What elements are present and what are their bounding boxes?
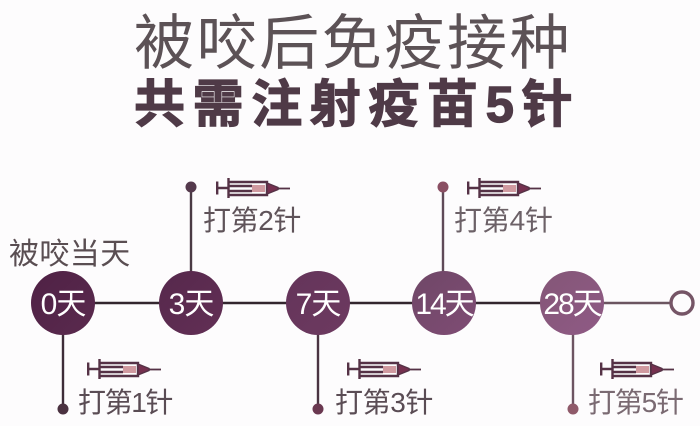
branch: dose 4 stem (438, 182, 448, 275)
branch: dose 3 stem (312, 330, 324, 414)
end ring (671, 292, 693, 314)
icon: syringe dose 1 (88, 359, 161, 379)
timeline axis (63, 302, 672, 304)
node: day 14: 14天 (415, 288, 474, 321)
node: day 7 (286, 271, 350, 335)
node: day 0 (31, 271, 95, 335)
label: dose 4: 打第4针 (454, 205, 553, 236)
label: dose 1: 打第1针 (78, 387, 172, 418)
label: dose 3: 打第3针 (335, 387, 433, 418)
node: day 0: 0天 (41, 288, 85, 321)
branch: dose 1 stem (58, 330, 68, 414)
node: day 3: 3天 (169, 288, 213, 321)
label: day of bite: 被咬当天 (9, 238, 131, 271)
branch: dose 2 stem (186, 182, 196, 275)
node: day 28: 28天 (543, 288, 602, 321)
branch: dose 5 stem (568, 330, 578, 414)
label: dose 5: 打第5针 (588, 387, 683, 418)
icon: syringe dose 3 (348, 359, 421, 379)
title: line two: 共需注射疫苗5针 (134, 76, 580, 133)
title: line one: 被咬后免疫接种 (134, 10, 572, 77)
icon: syringe dose 2 (217, 178, 290, 198)
icon: syringe dose 4 (468, 178, 541, 198)
label: dose 2: 打第2针 (203, 205, 301, 236)
node: day 3 (159, 271, 223, 335)
icon: syringe dose 5 (601, 359, 674, 379)
node: day 7: 7天 (296, 288, 340, 321)
node: day 28 (540, 271, 604, 335)
node: day 14 (412, 271, 476, 335)
